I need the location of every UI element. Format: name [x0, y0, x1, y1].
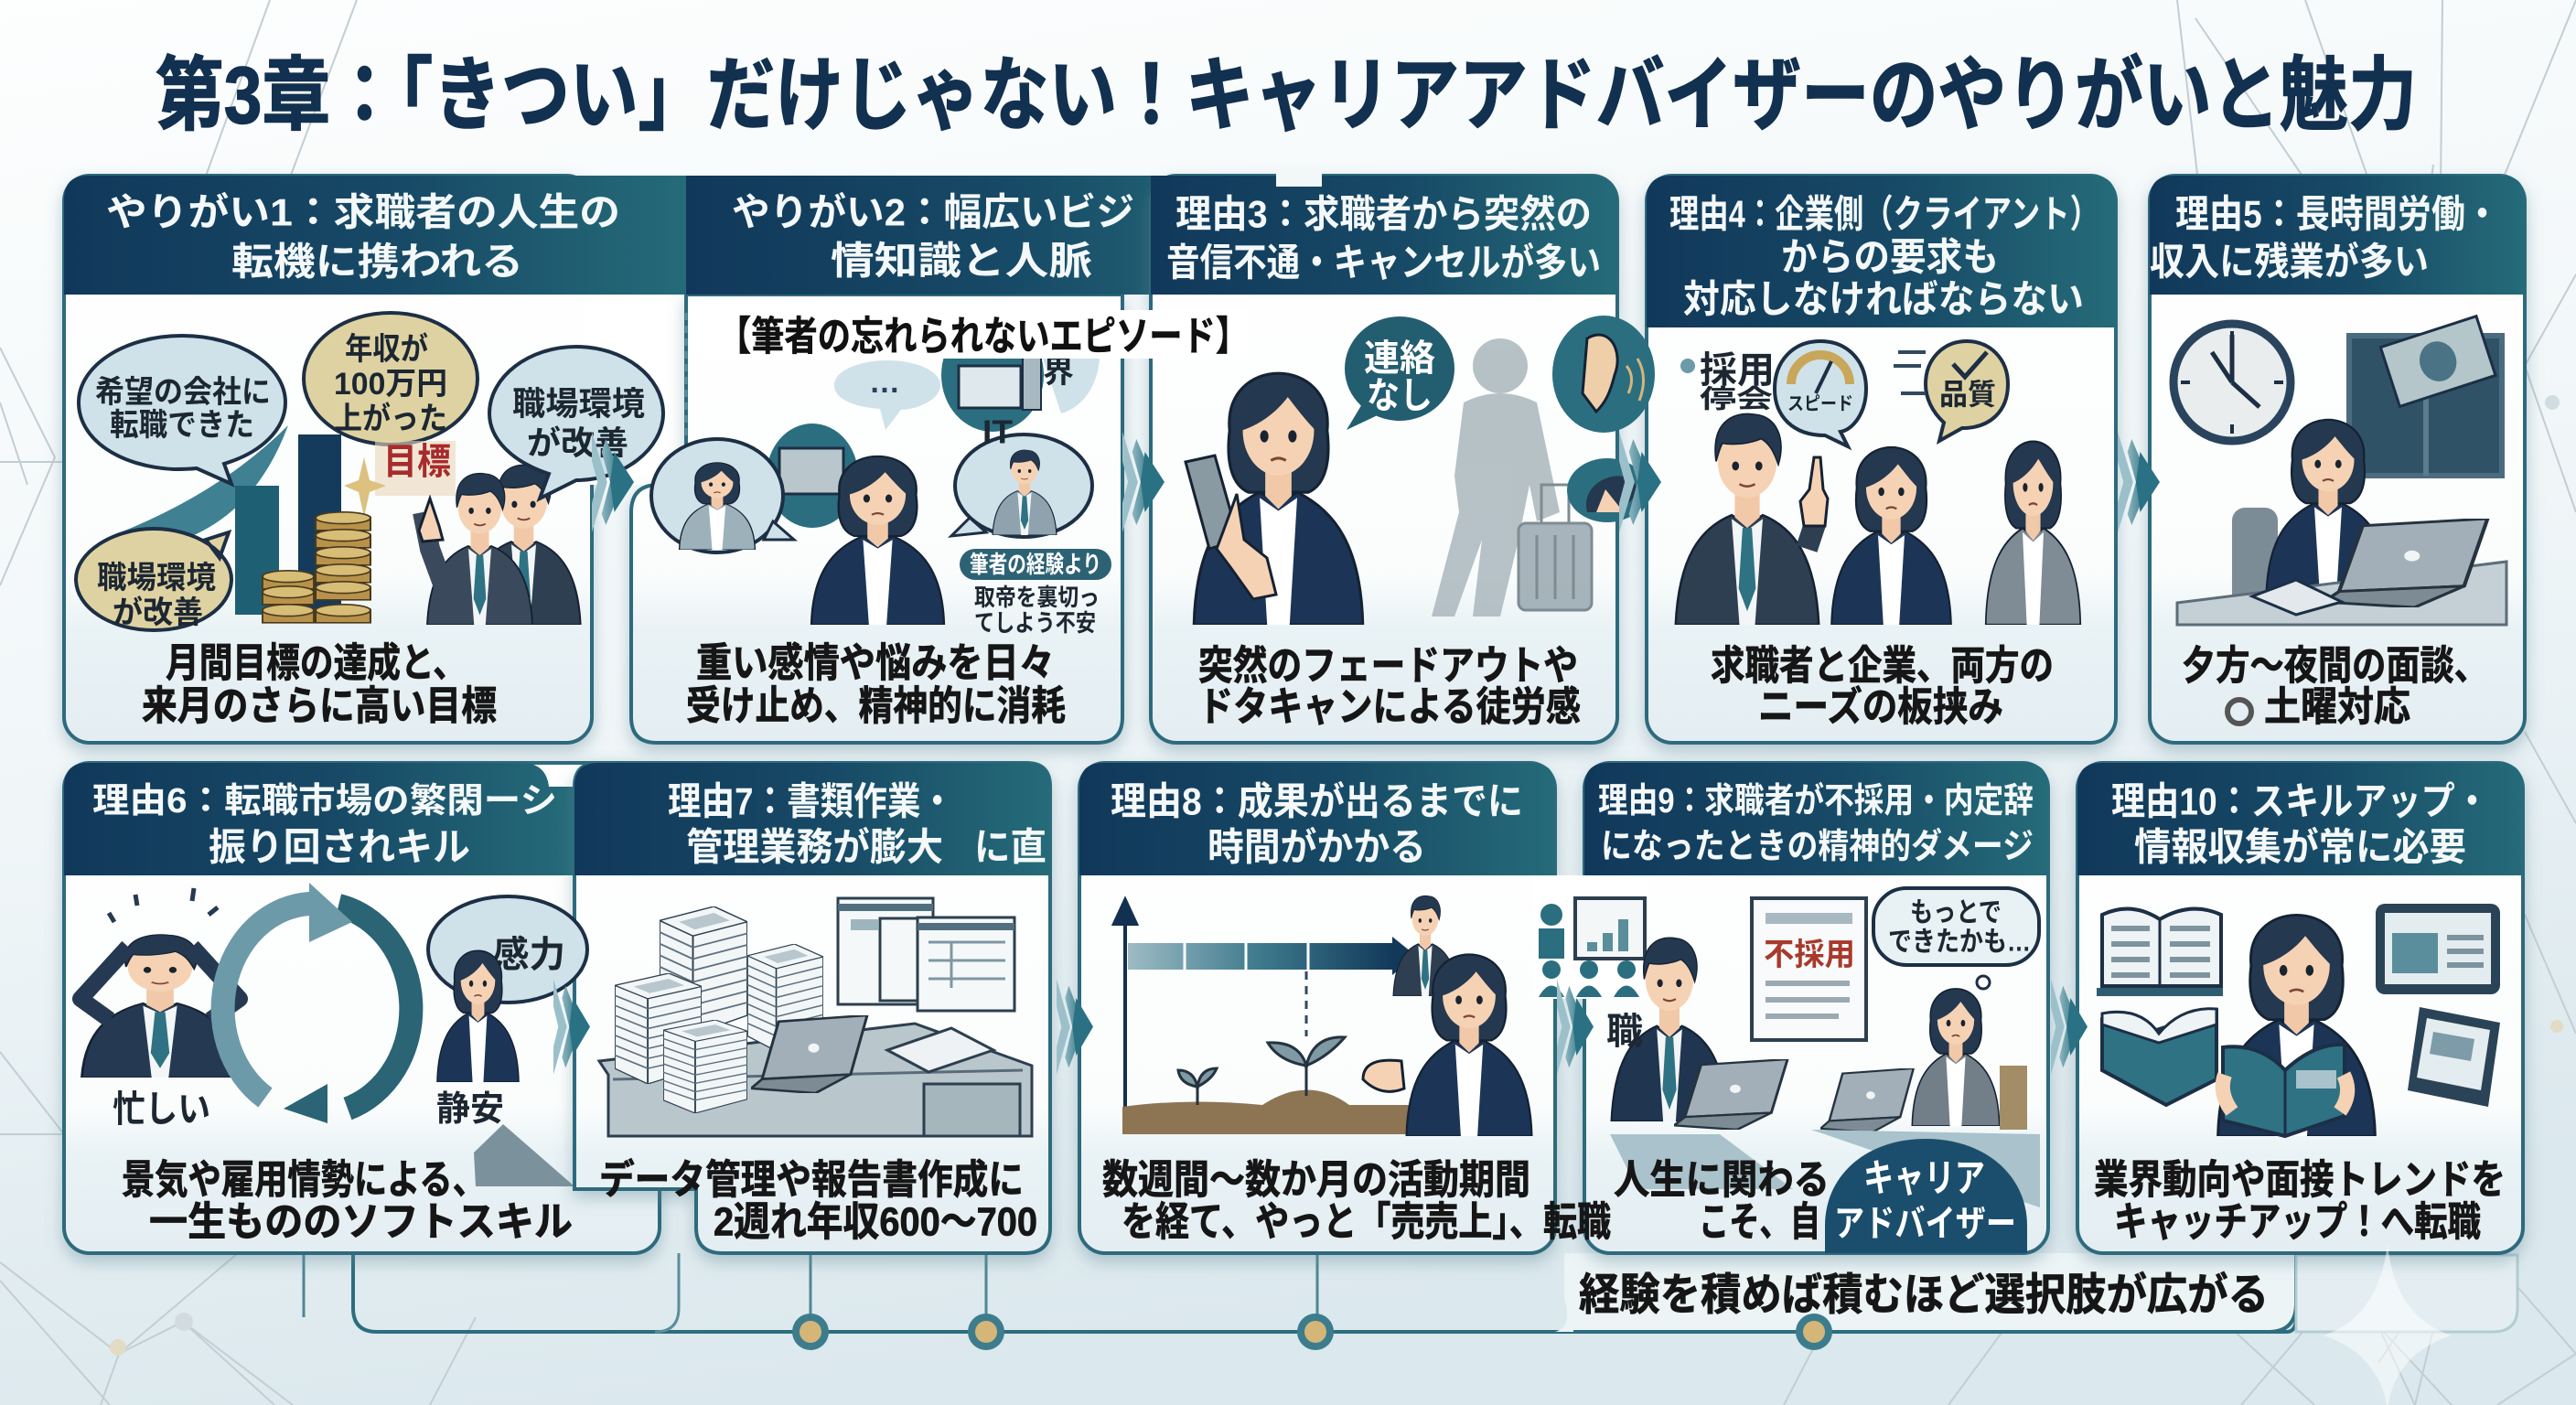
- panel: card 1: [64, 176, 686, 743]
- teal circle computer: [941, 318, 1044, 432]
- bubble: industry: [1043, 355, 1100, 413]
- panel: card 7: [574, 763, 1050, 1253]
- bubble: dots: [834, 360, 940, 430]
- document rejected: [1752, 898, 1866, 1040]
- presentation icon: [1533, 875, 1647, 999]
- laptop: [2324, 519, 2487, 607]
- bubble: desired company: 希望の会社に: [95, 375, 271, 410]
- woman working: [2267, 420, 2389, 596]
- panel: card 1: 来月のさらに高い目標: [142, 684, 497, 728]
- panel: bottom message box: [1555, 1253, 2517, 1332]
- recruiting list: 停会: [1700, 384, 1773, 413]
- laptop circle: [767, 424, 858, 528]
- bar chart: [235, 434, 341, 615]
- bubble: could do more: [1873, 888, 2039, 989]
- bubble: no contact: 連絡: [1364, 338, 1435, 379]
- bubble: salary: 100万円: [334, 367, 447, 402]
- desk shapes: [1610, 1130, 2040, 1207]
- label busy: 忙しい: [113, 1089, 210, 1130]
- sparkle: [344, 457, 386, 517]
- panel: card 4: [1647, 176, 2116, 743]
- arrows row 1: [592, 432, 2160, 532]
- bubble: quality: [1894, 341, 2008, 441]
- bubble: desired company: [79, 336, 285, 484]
- anxious note: [974, 584, 1100, 637]
- red label target: [375, 441, 456, 496]
- bubble: crying woman: [651, 439, 794, 552]
- card 10 caption: 業界動向や面接トレンドを: [2094, 1158, 2506, 1202]
- card 9 header: [1584, 763, 2048, 875]
- card 10 heading: 理由10：スキルアップ・: [2111, 779, 2489, 823]
- tablet portrait: [2408, 1007, 2500, 1107]
- arrows row 2: [553, 979, 2088, 1075]
- panel: card 3: ドタキャンによる徒労感: [1198, 684, 1581, 730]
- bottom connector lines: [304, 1253, 2296, 1332]
- bubble: workplace gold: 職場環境: [97, 561, 216, 595]
- card 8 caption: 数週間〜数か月の活動期間: [1102, 1158, 1530, 1202]
- dome: career adviser: [1825, 1139, 2027, 1253]
- card 9 heading: 理由9：求職者が不採用・内定辞: [1598, 782, 2034, 820]
- card 7 caption: データ管理や報告書作成に: [599, 1158, 1024, 1202]
- panel: card 2: 受け止め、精神的に消耗: [686, 684, 1066, 728]
- card 3 header: [1151, 176, 1617, 295]
- panel: card 6: [64, 763, 660, 1253]
- bubble: salary: 上がった: [334, 401, 447, 436]
- paper stacks: [615, 906, 823, 1113]
- bubble: workplace: が改善: [527, 424, 628, 461]
- stressed man: [80, 888, 240, 1078]
- bubble: could do more: もっとで: [1910, 898, 2002, 928]
- panel: card 5: [2150, 176, 2525, 743]
- card 4 header: [1647, 176, 2116, 327]
- panel: card 3: [1151, 170, 1617, 743]
- document rejected: 不採用: [1764, 938, 1855, 972]
- card 8 header: [1079, 763, 1555, 875]
- dome: career adviser: キャリア: [1863, 1156, 1985, 1200]
- bubble: speed gauge: [1775, 341, 1866, 446]
- card 10 header: [2077, 763, 2523, 875]
- panel: card 10: [2077, 763, 2523, 1253]
- clock: [2174, 324, 2291, 441]
- soil: [1122, 1090, 1422, 1134]
- panel: card 8: [1079, 763, 1555, 1253]
- dome: career adviser: アドバイザー: [1834, 1204, 2016, 1244]
- growth swoosh: [113, 425, 288, 540]
- panel: card 4: からの要求も: [1781, 236, 1999, 278]
- message text: 経験を積めば積むほど選択肢が広がる: [1579, 1271, 2269, 1319]
- woman grey: [1986, 442, 2080, 625]
- laptop woman: [1820, 1068, 1914, 1132]
- panel: card 3: 音信不通・キャンセルが多い: [1166, 241, 1601, 284]
- panel: card 10: 情報収集が常に必要: [2134, 825, 2466, 869]
- chair: [2232, 508, 2278, 608]
- card 8 heading: 理由8：成果が出るまでに: [1111, 779, 1523, 823]
- paper pile: [887, 1028, 993, 1072]
- woman at laptop: [1912, 989, 2000, 1126]
- bubble: desired company: 転職できた: [110, 408, 254, 443]
- panel: card 9: こそ、自: [1699, 1200, 1820, 1244]
- white extension of card 1: [585, 295, 686, 485]
- worried woman: [437, 950, 519, 1082]
- panel: card 2: 情知識と人脈: [831, 240, 1092, 282]
- recruiting list: [1680, 350, 1775, 413]
- document windows: [838, 898, 1014, 1011]
- panel: card 7: に直: [974, 825, 1046, 869]
- woman main: [811, 456, 944, 625]
- card 3 heading: 理由3：求職者から突然の: [1175, 192, 1592, 236]
- card 5 caption: 夕方〜夜間の面談、: [2182, 644, 2488, 688]
- bubble: no contact: [1345, 316, 1454, 430]
- ghost person with suitcase: [1432, 338, 1592, 617]
- card 4 caption: 求職者と企業、両方の: [1711, 644, 2054, 688]
- bubble: workplace: 職場環境: [512, 384, 645, 423]
- card 1 caption: 月間目標の達成と、: [166, 640, 467, 686]
- card 5 caption second line: 土曜対応: [2264, 684, 2410, 730]
- bubble: workplace: [489, 347, 663, 499]
- tablet landscape: [2376, 904, 2500, 994]
- card 8 caption second line: を経て、やっと「売売上」、転職: [1122, 1200, 1611, 1244]
- held book: [2223, 1045, 2347, 1136]
- label job: 職: [1606, 1012, 1643, 1052]
- card 4 heading: 理由4：企業側（クライアント）: [1669, 192, 2099, 236]
- card 5 heading: 理由5：長時間労働・: [2175, 192, 2499, 236]
- card 5 header: [2150, 176, 2525, 295]
- decorative sparkle: [2324, 1244, 2452, 1405]
- panel: card 4: ニーズの板挟み: [1758, 684, 2003, 730]
- label quiet: 静安: [436, 1090, 504, 1129]
- man behind: [1393, 896, 1457, 996]
- bubble: power: [428, 896, 587, 1003]
- laptop: [751, 1015, 867, 1093]
- cycle arrows: [223, 883, 411, 1123]
- laptop man: [1674, 1059, 1787, 1130]
- woman presenting: [1363, 954, 1531, 1136]
- card 1 header: [64, 176, 686, 295]
- panel: card 9: [1533, 763, 2048, 1253]
- card 7 header: [574, 763, 1050, 875]
- bubble: power: 感力: [493, 935, 565, 975]
- notebook: [2252, 580, 2342, 615]
- anxious note: てしよう不安: [974, 609, 1096, 637]
- anxious note: 取帝を裏切っ: [974, 584, 1100, 611]
- card 2 heading: やりがい2：幅広いビジ: [732, 190, 1134, 234]
- panel: card 4: 対応しなければならない: [1683, 278, 2084, 320]
- bubble: salary: 年収が: [345, 331, 428, 367]
- man at laptop: [1612, 938, 1727, 1121]
- desk: [2177, 562, 2506, 625]
- progress bar: [1128, 937, 1416, 975]
- closed book: [2102, 1009, 2216, 1105]
- panel: card 8: 時間がかかる: [1208, 825, 1426, 869]
- money bill: [2380, 316, 2496, 406]
- woman reading: [2218, 915, 2375, 1136]
- man pointing: [1676, 413, 1828, 625]
- badge: 筆者の経験より: [970, 551, 1101, 578]
- panel: card 6: 振り回されキル: [209, 825, 470, 869]
- IT label: IT: [982, 413, 1013, 450]
- ear circle icon: [1552, 316, 1655, 433]
- bubble: salary: [304, 313, 478, 445]
- chair: [2000, 1066, 2027, 1130]
- bubble: workplace gold: が改善: [113, 595, 203, 630]
- card 1 heading: やりがい1：求職者の人生の: [106, 190, 620, 234]
- bubble: workplace gold: [76, 529, 231, 630]
- bubble: industry: 界: [1043, 355, 1074, 390]
- small face circle: [1567, 458, 1648, 522]
- card 6 header: [64, 763, 574, 875]
- card 7 heading: 理由7：書類作業・: [668, 779, 954, 823]
- bubble: worried man: [951, 434, 1092, 537]
- dashed divider: [684, 313, 688, 437]
- card 6 heading: 理由6：転職市場の繁閑ーシ: [92, 782, 557, 820]
- bubble: could do more: できたかも…: [1888, 928, 2031, 957]
- bubble: speed gauge: スピード: [1787, 393, 1853, 414]
- panel: card 7: 2週れ年収600〜700: [714, 1200, 1037, 1244]
- people: [419, 465, 581, 625]
- panel: card 6: 一生もののソフトスキル: [149, 1200, 573, 1244]
- card 2 header: [686, 176, 1281, 295]
- panel: card 7: 管理業務が膨大: [686, 825, 943, 869]
- episode heading: 【筆者の忘れられないエピソード】: [718, 315, 1249, 359]
- bubble: dots: …: [869, 365, 900, 400]
- panel: card 1: 転機に携われる: [231, 240, 523, 284]
- bubble: no contact: なし: [1367, 376, 1433, 416]
- desk: [599, 1024, 1032, 1136]
- axis arrow: [1114, 900, 1136, 1134]
- timeline nodes: [792, 1314, 1832, 1350]
- sprouts: [1178, 1037, 1345, 1105]
- woman centre: [1831, 447, 1951, 625]
- panel: card 9: になったときの精神的ダメージ: [1601, 828, 2034, 866]
- panel: card 2: [631, 176, 1281, 743]
- open book: [2097, 909, 2223, 996]
- woman with phone: [1186, 373, 1363, 625]
- bubble: quality: 品質: [1939, 378, 1996, 411]
- card 3 caption: 突然のフェードアウトや: [1198, 644, 1578, 688]
- coin stacks: [263, 512, 370, 623]
- card 6 caption: 景気や雇用情勢による、: [122, 1158, 486, 1202]
- grey corner shape: [474, 1124, 574, 1186]
- panel: card 10: キャッチアップ！へ転職: [2114, 1200, 2481, 1244]
- night window: [2349, 336, 2502, 476]
- card 9 caption: 人生に関わる: [1614, 1158, 1830, 1202]
- panel: card 5: 収入に残業が多い: [2150, 240, 2429, 284]
- recruiting list: 採用: [1700, 350, 1775, 391]
- dashed guide: [1304, 971, 1308, 1036]
- card 2 caption: 重い感情や悩みを日々: [696, 640, 1055, 686]
- red label target: 目標: [383, 442, 451, 482]
